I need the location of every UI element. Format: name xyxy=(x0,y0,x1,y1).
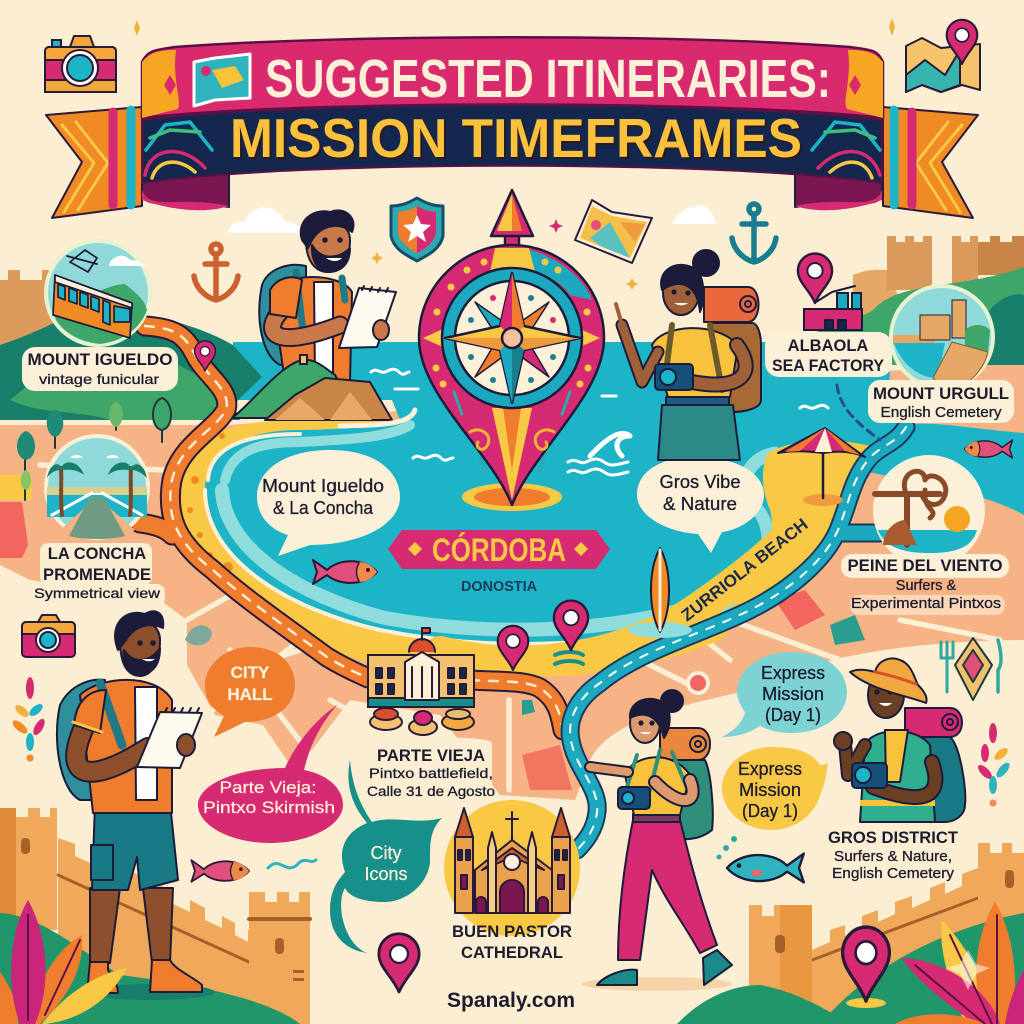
camera xyxy=(618,787,650,809)
backpack xyxy=(259,265,306,365)
right castle and hill xyxy=(800,236,1024,365)
icon: pin bottom right xyxy=(843,927,889,1001)
character: man with notepad top xyxy=(259,210,396,382)
label: Buen Pastor Cathedral xyxy=(452,922,572,962)
circle: La Concha promenade xyxy=(46,436,148,539)
orange road xyxy=(140,326,563,730)
bottom left foliage xyxy=(0,900,127,1024)
icon: camera top left xyxy=(45,36,116,92)
bubble: Express Mission teal: Mission xyxy=(762,684,824,704)
speech bubble: Gros Vibe & Nature: & Nature xyxy=(663,494,737,514)
label: Buen Pastor Cathedral: BUEN PASTOR xyxy=(452,922,572,941)
label: Gros District xyxy=(828,828,959,882)
right decorative drops xyxy=(976,723,1012,806)
bubble: Express Mission yellow: Express xyxy=(738,759,802,779)
website: Spanaly.com xyxy=(447,989,575,1012)
head xyxy=(120,621,160,676)
sea waves upper xyxy=(371,369,828,475)
left hill trees xyxy=(17,398,171,500)
torso xyxy=(80,680,172,813)
teal road xyxy=(570,427,906,850)
right beach xyxy=(722,441,873,618)
label: Gros District: GROS DISTRICT xyxy=(828,828,959,847)
banner pink pattern left xyxy=(142,50,179,118)
title line two: MISSION TIMEFRAMES xyxy=(232,109,804,171)
label: Mount Urgull: English Cemetery xyxy=(880,405,1002,421)
label: Parte Vieja xyxy=(365,738,495,799)
label: Peine del Viento: Surfers & xyxy=(896,578,957,594)
banner pink band xyxy=(142,37,883,118)
shoes xyxy=(597,970,637,985)
head xyxy=(306,221,350,272)
icon: cutlery and pintxo xyxy=(941,638,1001,700)
sparkles gold xyxy=(371,252,638,290)
legs xyxy=(90,888,120,963)
sand dots xyxy=(187,433,583,664)
label: Gros District: Surfers & Nature, xyxy=(834,849,952,865)
bubble: City Icons: City xyxy=(370,843,402,863)
label: La Concha Promenade: LA CONCHA xyxy=(48,545,146,563)
bubble: Parte Vieja: Parte Vieja: xyxy=(220,778,316,797)
label: La Concha Promenade: Symmetrical view xyxy=(34,585,161,601)
shorts xyxy=(92,803,178,890)
map land xyxy=(0,360,1024,800)
pins on bay xyxy=(498,601,588,670)
bubble: Express Mission yellow: Mission xyxy=(739,780,801,800)
speech bubble: Gros Vibe & Nature: Gros Vibe xyxy=(660,472,740,492)
icon: pin albaola xyxy=(798,254,832,303)
backpack and roll xyxy=(709,323,761,412)
dashed sea route xyxy=(837,385,880,440)
left hills xyxy=(0,270,262,420)
arms xyxy=(590,767,628,772)
label: La Concha Promenade xyxy=(30,543,165,606)
speech bubble: Gros Vibe & Nature xyxy=(637,457,764,553)
shirt xyxy=(652,328,738,397)
sparkle pink xyxy=(549,219,563,233)
bottom right castle xyxy=(677,843,1024,1024)
bottom left castle xyxy=(0,808,310,1024)
label: Parte Vieja: Pintxo battlefield, xyxy=(369,765,493,781)
small wave xyxy=(268,860,316,868)
cloud left xyxy=(228,207,302,233)
icon: shield xyxy=(391,198,443,261)
banner left tail xyxy=(46,107,142,218)
bubble: Express Mission yellow xyxy=(722,747,828,830)
compass body xyxy=(419,245,604,505)
left decorative drops xyxy=(11,677,47,762)
cathedral xyxy=(444,800,580,936)
label: Mount Urgull xyxy=(868,380,1014,423)
circle: Peine del Viento xyxy=(873,455,985,567)
factory xyxy=(804,286,862,330)
beach wave under hill xyxy=(340,410,415,426)
bubble: Parte Vieja xyxy=(198,705,343,843)
label: Peine del Viento xyxy=(841,554,1009,615)
bubble: City Hall: CITY xyxy=(231,663,270,682)
cloud right xyxy=(672,205,716,224)
icon: fish bay xyxy=(313,560,377,584)
arms xyxy=(622,325,658,382)
icon: fish left lower xyxy=(191,860,249,882)
bubble: Express Mission teal: Express xyxy=(761,663,825,683)
compass dial xyxy=(442,268,582,408)
icon: anchor left xyxy=(194,244,238,300)
bubble: City Hall xyxy=(205,647,295,737)
beach band xyxy=(440,500,820,662)
character: walking woman xyxy=(582,690,732,991)
icon: camera small xyxy=(22,615,75,657)
icon: surfboard xyxy=(628,548,692,638)
bubble: Express Mission teal xyxy=(722,652,847,737)
icon: fish right lower xyxy=(727,854,804,882)
left map colour blocks xyxy=(0,475,212,645)
title line two: MISSION TIMEFRAMES xyxy=(230,107,802,169)
label: Albaola Sea Factory: ALBAOLA xyxy=(788,337,868,355)
arm xyxy=(76,725,148,772)
head xyxy=(868,672,904,718)
notepad xyxy=(137,712,202,768)
sea xyxy=(205,342,1024,644)
bubble: City Icons: Icons xyxy=(364,864,408,884)
head xyxy=(661,690,683,712)
city blocks xyxy=(522,590,865,790)
shoes xyxy=(87,962,118,993)
torso xyxy=(860,731,935,822)
camera xyxy=(655,364,693,390)
camera xyxy=(852,763,887,788)
subtitle: DONOSTIA xyxy=(461,578,537,595)
shadow xyxy=(582,977,732,991)
beach label: ZURRIOLA BEACH xyxy=(678,515,812,625)
character: woman with camera top xyxy=(616,250,761,460)
shadow under pin xyxy=(846,998,886,1008)
map streets xyxy=(40,465,1000,790)
circle: Mount Igueldo funicular xyxy=(46,241,150,345)
backpack and roll xyxy=(670,760,713,839)
arms xyxy=(272,310,340,338)
top hill and rock xyxy=(232,355,392,420)
compass base xyxy=(462,483,562,511)
bubble: City Hall: HALL xyxy=(227,685,273,704)
bubble: Express Mission teal: (Day 1) xyxy=(765,705,821,725)
pants xyxy=(618,820,717,960)
banner right tail xyxy=(883,107,978,218)
bubble: City Icons xyxy=(330,760,442,953)
banner folds xyxy=(142,172,229,207)
label: Albaola Sea Factory: SEA FACTORY xyxy=(772,357,884,375)
label: Mount Urgull: MOUNT URGULL xyxy=(873,384,1009,403)
icon: anchor right xyxy=(732,204,776,262)
label: Mount Igueldo xyxy=(22,347,178,391)
shirt xyxy=(625,757,690,815)
pintxo plates xyxy=(370,708,474,735)
bay sand rim xyxy=(174,420,840,677)
compass pin xyxy=(419,190,604,511)
character: man with notepad bottom xyxy=(57,611,202,993)
city ribbon xyxy=(388,530,610,569)
hat xyxy=(850,658,927,703)
character: hiker with hat xyxy=(834,658,965,822)
label: Albaola Sea Factory xyxy=(765,332,892,377)
label: Parte Vieja: Calle 31 de Agosto xyxy=(367,783,495,799)
label: Buen Pastor Cathedral: CATHEDRAL xyxy=(461,943,563,962)
banner xyxy=(46,37,978,218)
jeans xyxy=(658,405,740,460)
arms xyxy=(845,745,865,775)
bubbles near fish xyxy=(716,836,737,860)
label: Mount Igueldo: MOUNT IGUELDO xyxy=(28,351,173,369)
icon: umbrella xyxy=(778,428,865,506)
backpack xyxy=(57,680,105,800)
banner navy band xyxy=(142,105,882,183)
banner map icon xyxy=(194,54,250,106)
roll and backpack xyxy=(905,708,962,737)
head xyxy=(693,250,719,276)
bottom right foliage xyxy=(895,902,1024,1024)
label: Peine del Viento: PEINE DEL VIENTO xyxy=(848,556,1002,575)
icon: map top right xyxy=(906,20,980,92)
icon: fish right xyxy=(964,440,1012,458)
label: Parte Vieja: PARTE VIEJA xyxy=(377,746,485,765)
banner pink pattern right xyxy=(846,50,883,118)
speech bubble: Mount Igueldo & La Concha xyxy=(257,450,400,556)
sparkles top xyxy=(134,18,895,36)
icon: pin igueldo road xyxy=(195,341,215,371)
city ribbon: CÓRDOBA xyxy=(432,532,566,568)
bubble: Express Mission yellow: (Day 1) xyxy=(742,801,798,821)
label: Gros District: English Cemetery xyxy=(832,866,955,882)
torso xyxy=(272,277,352,382)
icon: pin bottom xyxy=(379,934,419,992)
compass arrow xyxy=(491,190,533,248)
banner navy pattern xyxy=(145,122,880,178)
city hall building xyxy=(368,628,474,707)
speech bubble: Mount Igueldo & La Concha: & La Concha xyxy=(273,498,374,518)
circle: Mount Urgull xyxy=(891,286,993,388)
title line one: SUGGESTED ITINERARIES: xyxy=(265,49,831,109)
label: La Concha Promenade: PROMENADE xyxy=(43,566,151,584)
notepad xyxy=(339,288,396,348)
label: Peine del Viento: Experimental Pintxos xyxy=(851,596,1001,612)
speech bubble: Mount Igueldo & La Concha: Mount Igueldo xyxy=(262,476,384,496)
icon: small map xyxy=(575,200,652,263)
bubble: Parte Vieja: Pintxo Skirmish xyxy=(203,798,335,817)
label: Mount Igueldo: vintage funicular xyxy=(39,371,159,387)
